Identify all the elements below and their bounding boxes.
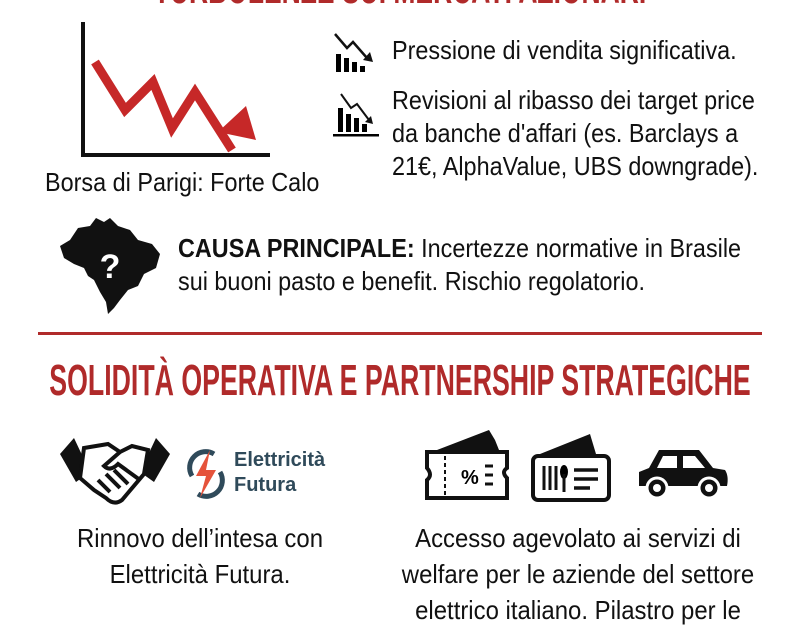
logo: Elettricità Futura: Elettricità [234,449,325,471]
heading: operational solidity: SOLIDITÀ OPERATIVA E PARTNERSHIP STRATEGICHE [49,356,751,405]
text: welfare access: Accesso agevolato ai servizi di [415,523,741,553]
icon: meal voucher [531,434,611,502]
text: main cause: sui buoni pasto e benefit. Rischio regolatorio. [178,266,645,296]
icon: brazil map with question mark [60,218,160,314]
text: welfare access: welfare per le aziende del settore [402,559,754,589]
text: target revisions: da banche d'affari (es. Barclays a [392,118,738,148]
icon: handshake [60,438,170,505]
text: main cause [178,233,741,296]
text: welfare access: elettrico italiano. Pilastro per le [415,595,741,625]
chart: falling line [81,22,270,157]
icon: discount ticket [425,430,509,500]
icon: car [639,450,728,496]
text: partnership renewal: Rinnovo dell’intesa con [77,523,323,553]
icon: target revisions [333,93,379,136]
text: target revisions: Revisioni al ribasso dei target price [392,85,755,115]
icon: brazil map with question mark: ? [100,248,120,286]
icon: selling pressure [334,33,373,72]
logo: Elettricità Futura [187,449,326,499]
logo: Elettricità Futura: Futura [234,474,296,496]
text: target revisions [392,85,758,181]
text: target revisions: 21€, AlphaValue, UBS downgrade). [392,151,758,181]
text: partnership renewal: Elettricità Futura. [110,559,290,589]
text: main cause: CAUSA PRINCIPALE: Incertezze normative in Brasile [178,233,741,263]
icon: discount ticket: % [461,467,479,489]
text: partnership renewal [77,523,323,589]
text: welfare access [402,523,754,625]
text: selling pressure: Pressione di vendita significativa. [392,35,737,65]
chart caption: Borsa di Parigi: Forte Calo [45,167,319,197]
